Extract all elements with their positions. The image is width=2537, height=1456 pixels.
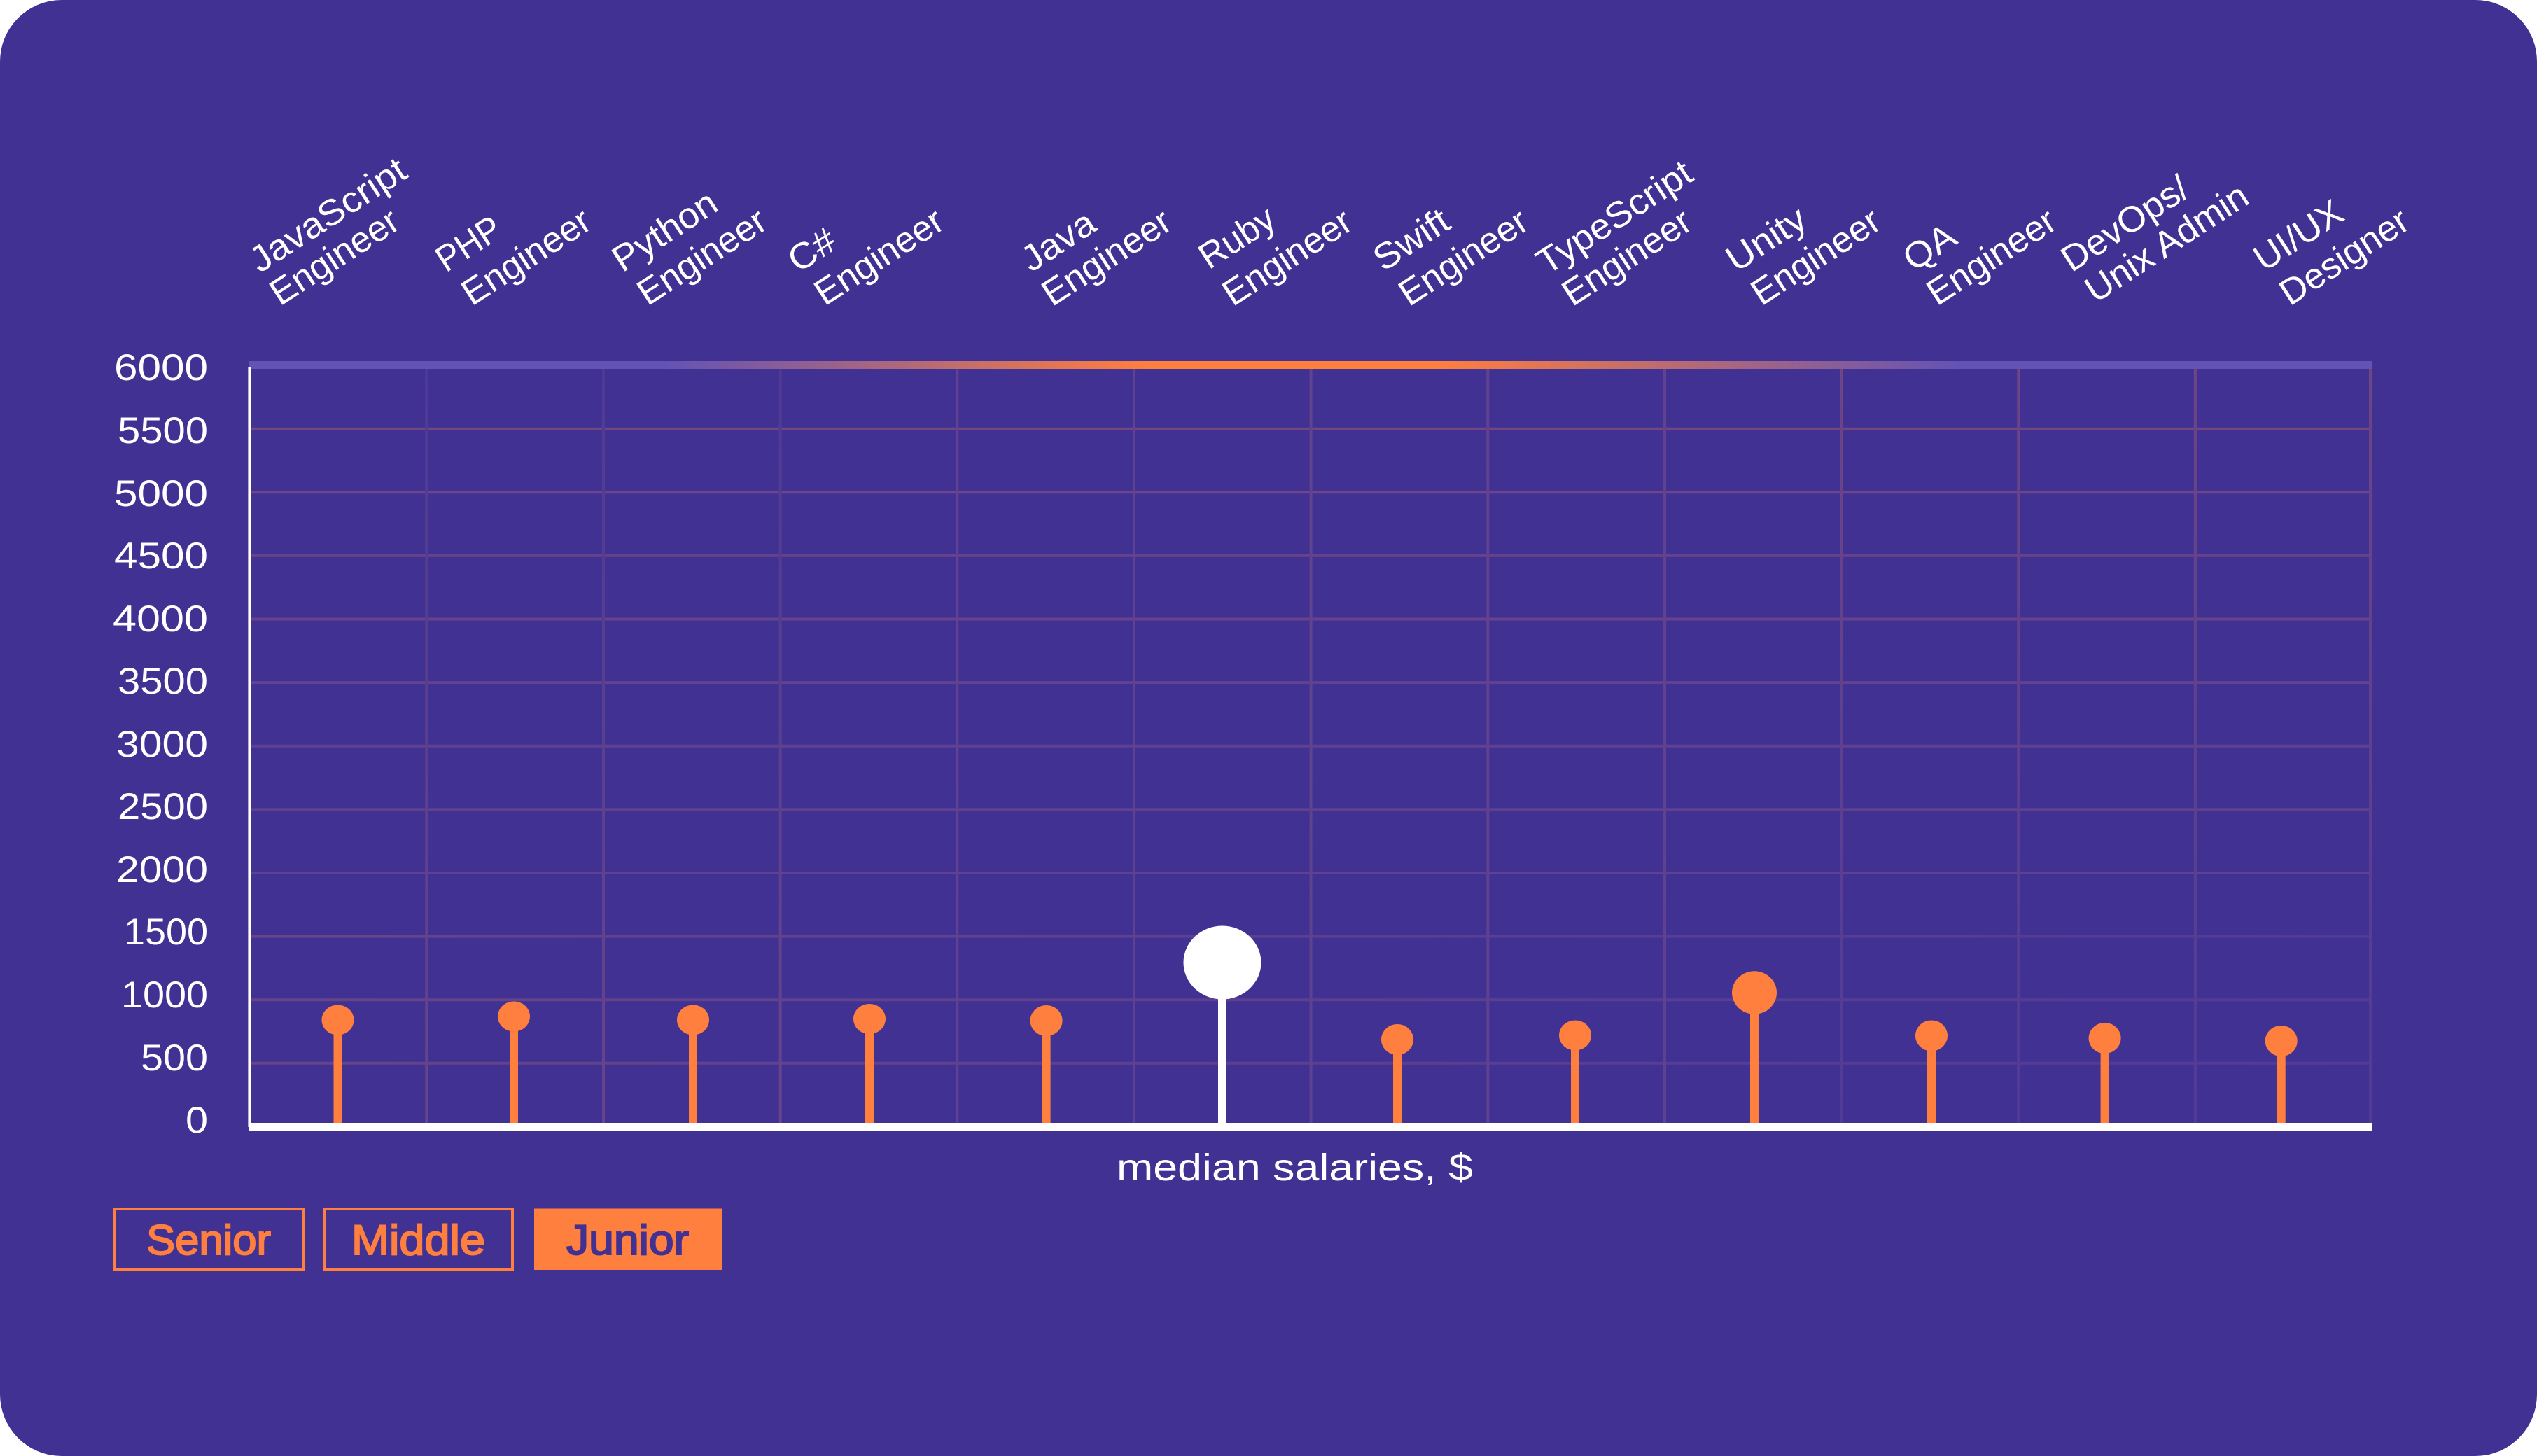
lollipop: Python Engineer [677,1005,709,1125]
label: Java Engineer: Engineer [1035,201,1179,314]
label: C# Engineer: Engineer [807,200,951,314]
legend: Middle [325,1209,512,1270]
y axis labels: 3000 [116,724,208,765]
y axis labels: 2000 [116,849,208,890]
y axis labels [113,347,208,1141]
legend: Senior: Senior [146,1217,271,1264]
label: Swift Engineer: Swift [1366,200,1458,279]
lollipop: C# Engineer [853,1004,886,1126]
lollipop: Swift Engineer [1381,1024,1413,1125]
label: Ruby Engineer: Ruby [1191,198,1283,277]
legend: Junior (active): Junior [566,1217,689,1264]
label: JavaScript Engineer: Engineer [263,200,407,314]
label: JavaScript Engineer: JavaScript [242,149,414,281]
lollipop: QA Engineer [1915,1021,1948,1126]
lollipop: DevOps/Unix Admin [2089,1023,2121,1125]
label: QA Engineer: QA [1896,216,1964,279]
label: Python Engineer: Engineer [630,200,774,314]
y axis labels: 1500 [124,911,208,953]
label: PHP Engineer: PHP [428,208,509,280]
label: Unity Engineer: Unity [1719,198,1814,280]
job title labels [242,149,2417,314]
y axis labels: 5500 [118,410,208,451]
legend: Middle: Middle [351,1217,485,1264]
lollipop: Java Engineer [1030,1005,1063,1125]
label: QA Engineer: Engineer [1920,200,2064,314]
y axis labels: 3500 [118,661,208,702]
x axis title: median salaries, $ [1117,1147,1473,1189]
top gradient band at 6000 [249,361,2372,369]
label: UI/UX Designer: UI/UX [2246,192,2351,279]
lollipop: UI/UX Designer [2265,1026,2298,1125]
label: DevOps/Unix Admin: Unix Admin [2078,176,2256,311]
label: UI/UX Designer: Designer [2272,200,2417,314]
label: Swift Engineer: Engineer [1392,201,1536,314]
y axis labels: 4500 [114,536,208,577]
legend: Senior [115,1209,303,1270]
y axis labels: 2500 [118,786,208,827]
label: PHP Engineer: Engineer [454,200,599,314]
y axis labels: 1000 [121,974,208,1016]
lollipop: TypeScript Engineer [1559,1021,1591,1125]
label: Unity Engineer: Engineer [1744,200,1888,314]
x axis [249,1123,2372,1130]
label: Ruby Engineer: Engineer [1215,201,1360,314]
legend [115,1208,722,1270]
y axis labels: 0 [186,1100,208,1141]
lollipop: JavaScript Engineer [322,1005,354,1125]
left axis [248,368,251,1127]
y axis labels: 4000 [113,598,208,640]
label: TypeScript Engineer: Engineer [1555,201,1699,314]
label: DevOps/Unix Admin: DevOps/ [2054,167,2197,280]
label: TypeScript Engineer: TypeScript [1529,152,1700,283]
label: Python Engineer: Python [605,182,725,280]
legend: Junior (active) [534,1208,722,1270]
lollipop: PHP Engineer [498,1001,530,1125]
y axis labels: 5000 [114,473,208,514]
lollipop: Unity Engineer [1732,971,1777,1125]
y axis labels: 500 [141,1037,208,1079]
chart area [248,361,2372,1130]
lollipop: Ruby Engineer (highlighted) [1183,925,1261,1125]
label: C# Engineer: C# [781,220,844,281]
y axis labels: 6000 [114,347,208,388]
label: Java Engineer: Java [1014,202,1103,280]
